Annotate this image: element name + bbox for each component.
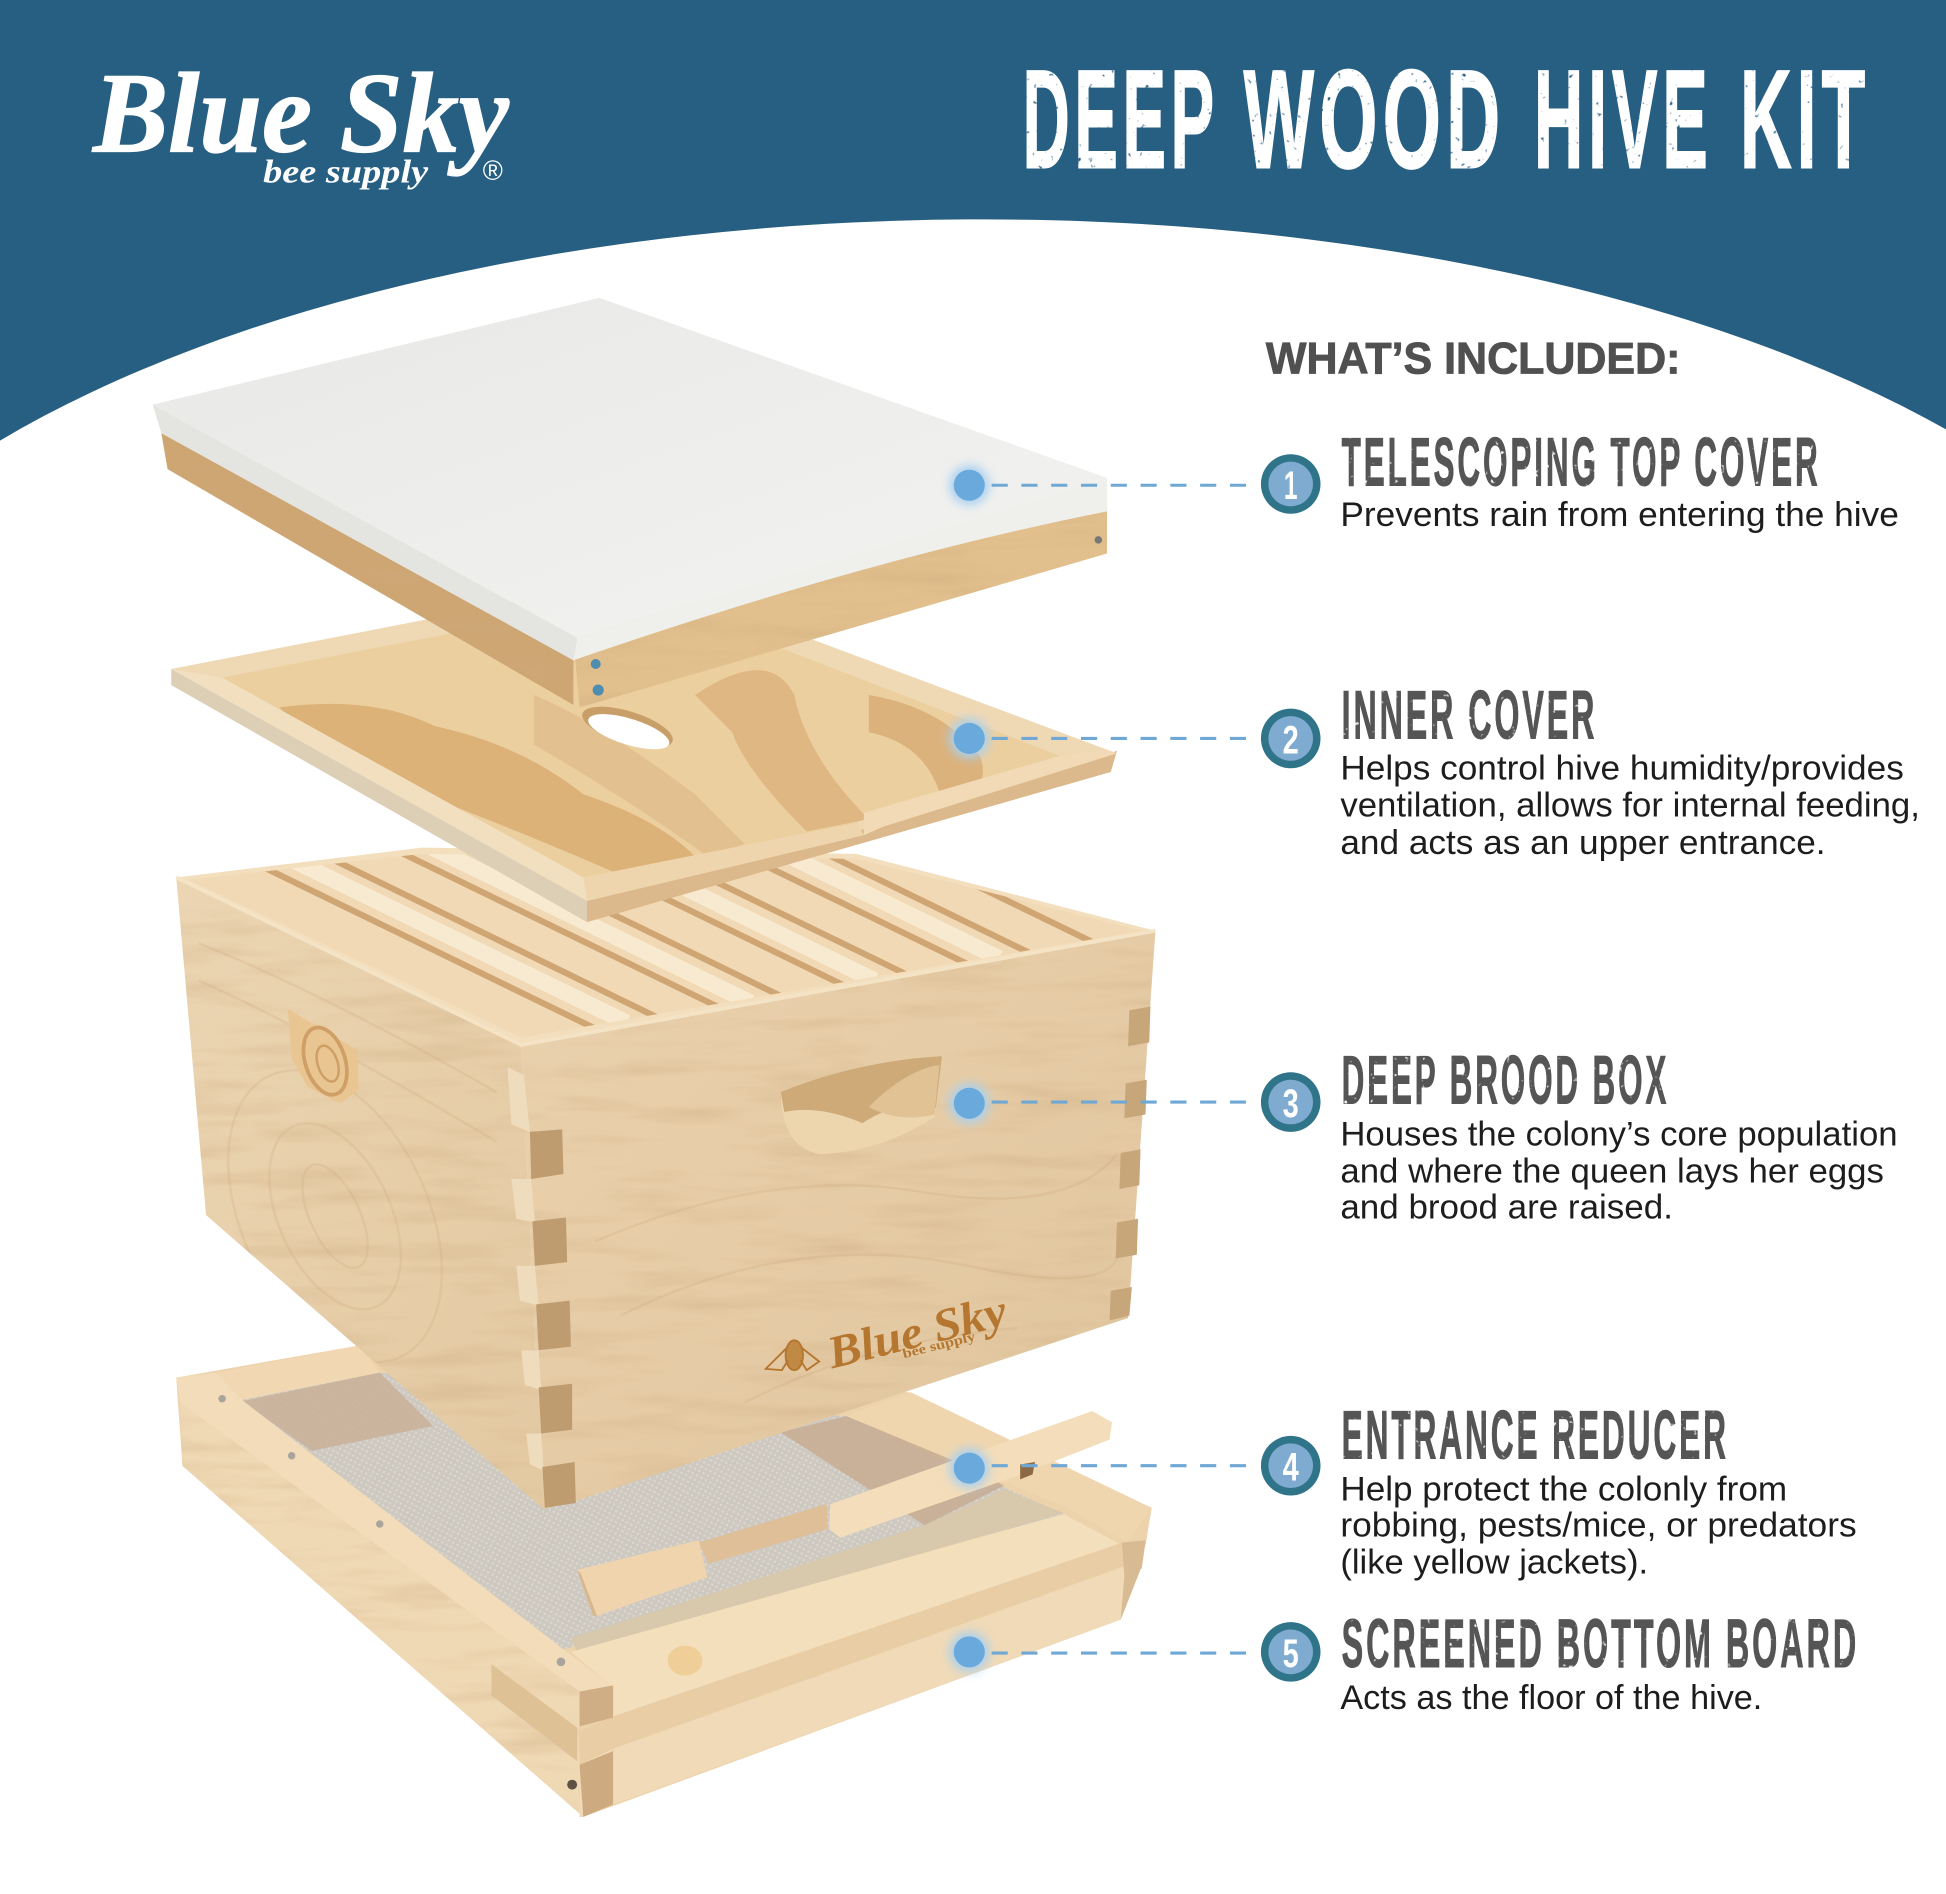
item 1: telescoping top cover [1261, 424, 1899, 534]
item 4: entrance reducer [1261, 1397, 1857, 1582]
box top with frames [180, 848, 1152, 1043]
front face grain contours [596, 1154, 1120, 1402]
item 2: inner cover: 2 [1283, 718, 1299, 762]
item 5: screened bottom board: 5 [1283, 1632, 1299, 1676]
hive component: screened bottom board [176, 1345, 1152, 1817]
item 2: inner cover: and acts as an upper entrance. [1340, 824, 1826, 862]
leader 1 [949, 465, 1246, 505]
metal top [153, 298, 1107, 638]
wood rim left [161, 433, 573, 705]
inner cover front rim [583, 823, 864, 901]
wood rim right [573, 490, 1107, 707]
box left face [176, 877, 544, 1509]
icon: bee [766, 1340, 819, 1370]
item 2: inner cover: ventilation, allows for internal feeding, [1340, 787, 1920, 825]
item 3: deep brood box: Houses the colony’s core population [1340, 1116, 1898, 1154]
branded logo on box: bee supply [901, 1329, 977, 1361]
leader 4 [949, 1448, 1246, 1488]
logo: Blue Sky bee supply: Blue Sky [91, 49, 509, 176]
inner cover left rim [171, 669, 587, 901]
box joints right column [1110, 1007, 1150, 1321]
leader 5 [949, 1632, 1246, 1672]
title: WOOD [1244, 41, 1505, 198]
plywood panel [222, 634, 1060, 878]
board silhouette [176, 1345, 1152, 1817]
hive component: inner cover [171, 577, 1117, 922]
board back rim [216, 1345, 380, 1400]
title: DEEP [1023, 41, 1219, 198]
finger tenons on left face [508, 1067, 544, 1471]
front hand hold [781, 1056, 942, 1154]
item 5: screened bottom board: Acts as the floor of the hive. [1340, 1679, 1762, 1717]
entrance reducer [577, 1411, 1112, 1616]
inner cover top frame [171, 577, 1117, 901]
board lower front face [580, 1566, 1142, 1817]
leader 3 [949, 1083, 1246, 1123]
board left outer face [180, 1402, 583, 1817]
heading: what's included: WHAT’S INCLUDED: [1266, 335, 1680, 384]
item 3: deep brood box [1261, 1042, 1898, 1227]
logo: Blue Sky bee supply: bee supply [263, 153, 429, 189]
item 5: screened bottom board [1261, 1606, 1859, 1717]
item 2: inner cover: INNER COVER [1342, 677, 1597, 753]
hive component: deep brood box [174, 761, 1167, 1509]
item 4: entrance reducer: (like yellow jackets). [1340, 1544, 1648, 1582]
item 2: inner cover [1261, 677, 1920, 862]
corner posts [580, 1685, 613, 1726]
box front face [521, 931, 1155, 1509]
entrance ramp [571, 1514, 1122, 1720]
item 4: entrance reducer: Help protect the colonly from [1340, 1470, 1787, 1508]
item 1: telescoping top cover: 1 [1284, 464, 1298, 508]
board left rim strip [176, 1373, 613, 1692]
left face grain contours [198, 942, 497, 1364]
item 3: deep brood box: 3 [1283, 1082, 1299, 1126]
board right rim strip [846, 1392, 1152, 1543]
item 2: inner cover: Helps control hive humidity/provides [1340, 749, 1904, 787]
marker: glow points and leader lines [949, 465, 1246, 1672]
item 4: entrance reducer: robbing, pests/mice, or predators [1340, 1506, 1857, 1544]
rough-cut band [580, 1543, 1146, 1767]
branded logo on box: Blue Sky [821, 1284, 1012, 1378]
title [1023, 41, 1870, 198]
item 4: entrance reducer: 4 [1283, 1446, 1299, 1490]
title: HIVE [1534, 41, 1713, 198]
leader 2 [949, 719, 1246, 758]
wire screen [242, 1373, 1064, 1649]
logo: Blue Sky bee supply: ® [483, 155, 503, 186]
oval feed hole [577, 698, 677, 757]
item 3: deep brood box: and brood are raised. [1340, 1189, 1673, 1227]
box joints left column [530, 1129, 576, 1508]
hive component: telescoping top cover [153, 298, 1107, 707]
item 3: deep brood box: and where the queen lays her eggs [1340, 1153, 1884, 1191]
left hand hold [288, 1009, 359, 1103]
item 1: telescoping top cover: Prevents rain from entering the hive [1340, 496, 1899, 534]
inner cover side faces [171, 669, 587, 922]
metal flange [153, 405, 577, 660]
